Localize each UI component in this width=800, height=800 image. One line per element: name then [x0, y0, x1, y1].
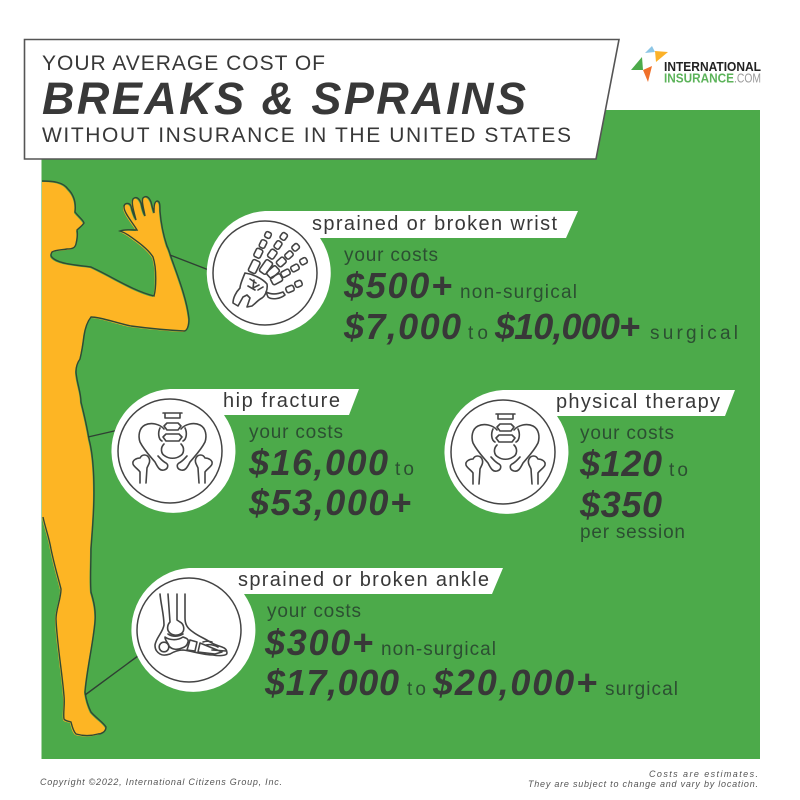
icon: hand x-ray: [213, 221, 317, 325]
therapy costs: $120: [579, 443, 662, 484]
wrist label bar and circle: [207, 211, 578, 335]
panel: sprained or broken wrist: [170, 211, 738, 347]
copyright: Copyright ©2022, International Citizens Group, Inc.: [40, 777, 282, 787]
ankle heading: sprained or broken ankle: [238, 569, 489, 591]
ankle costs: $20,000+: [432, 662, 597, 703]
hip heading: hip fracture: [223, 390, 340, 412]
logo: International Insurance: .COM: [734, 70, 761, 86]
therapy label bar and circle: [444, 390, 735, 514]
panel: sprained or broken ankle: [85, 568, 678, 703]
logo: International Insurance: [631, 46, 761, 86]
wrist heading: sprained or broken wrist: [312, 213, 557, 235]
figure: human body silhouette: [42, 181, 189, 736]
wrist costs: to: [468, 323, 488, 344]
ankle label bar and circle: [131, 568, 503, 692]
ankle costs: non-surgical: [381, 639, 496, 660]
therapy costs: your costs: [580, 423, 674, 444]
title banner: [24, 40, 619, 159]
wrist costs: surgical: [650, 323, 738, 344]
wrist costs: $500+: [343, 265, 452, 306]
wrist costs: your costs: [344, 245, 438, 266]
therapy costs: $350: [579, 484, 662, 525]
therapy costs: [579, 423, 688, 543]
logo wordmark: INTERNATIONAL: [664, 59, 761, 74]
disclaimer: [528, 769, 758, 789]
therapy heading: physical therapy: [556, 391, 720, 413]
panel: hip fracture: [88, 389, 414, 523]
ankle costs: your costs: [267, 601, 361, 622]
panel: green background: [42, 110, 760, 759]
main title: BREAKS & SPRAINS: [42, 73, 526, 124]
hip costs: $53,000+: [248, 482, 411, 523]
icon: pelvis x-ray, therapy: [451, 400, 555, 504]
hip costs: $16,000: [248, 442, 388, 483]
ankle connector line: [85, 653, 142, 695]
hip costs: your costs: [249, 422, 343, 443]
icon: pelvis x-ray: [118, 399, 222, 503]
banner shape: [24, 40, 619, 159]
title line three: WITHOUT INSURANCE IN THE UNITED STATES: [42, 124, 571, 147]
therapy costs: per session: [580, 522, 685, 543]
logo: International Insurance: INSURANCE: [664, 70, 734, 86]
hip costs: [248, 422, 414, 523]
ankle costs: [264, 601, 678, 703]
ankle costs: $300+: [264, 622, 373, 663]
panel: physical therapy: [444, 390, 735, 543]
therapy costs: to: [669, 460, 688, 481]
wrist costs: non-surgical: [460, 282, 577, 303]
logo mark: [631, 46, 668, 82]
wrist costs: $10,000+: [494, 306, 640, 347]
ankle costs: surgical: [605, 679, 678, 700]
hip connector line: [88, 429, 123, 437]
ankle costs: to: [407, 679, 426, 700]
title line one: YOUR AVERAGE COST OF: [42, 52, 325, 75]
hip costs: to: [395, 459, 414, 480]
ankle costs: $17,000: [264, 662, 399, 703]
wrist costs: $7,000: [343, 306, 461, 347]
wrist connector line: [170, 255, 214, 272]
hip label bar and circle: [111, 389, 359, 513]
disclaimer: Costs are estimates.: [649, 769, 758, 779]
disclaimer: They are subject to change and vary by location.: [528, 779, 758, 789]
wrist costs: [343, 245, 738, 347]
icon: foot x-ray: [137, 578, 241, 682]
